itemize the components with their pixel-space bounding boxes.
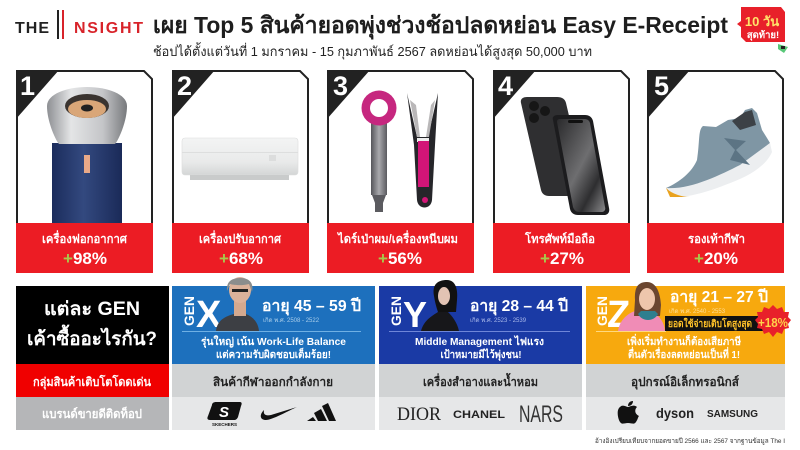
description: แต่ความรับผิดชอบเต็มร้อย!	[216, 347, 331, 361]
gen label Y	[388, 294, 427, 335]
category bar 1: เครื่องฟอกอากาศ	[42, 230, 127, 246]
brands: NARS	[519, 401, 563, 428]
category bar 2	[172, 223, 309, 273]
description	[627, 333, 741, 361]
logo: Adidas	[307, 403, 336, 421]
panel: product 1 air purifier	[16, 70, 153, 273]
icon: hair dryer	[362, 90, 396, 212]
row label: top brands: แบรนด์ขายดีติดท็อป	[42, 406, 142, 421]
category bar 5: รองเท้ากีฬา	[688, 232, 745, 246]
panel: product 2 air conditioner	[172, 70, 309, 273]
number badge 5	[647, 70, 690, 119]
description: เป้าหมายมีไว้พุ่งชน!	[440, 348, 522, 362]
number badge 5: 5	[654, 71, 669, 101]
subtitle: ช้อปได้ตั้งแต่วันที่ 1 มกราคม - 15 กุมภาพันธ์ 2567 ลดหย่อนได้สูงสุด 50,000 บาท	[153, 42, 592, 60]
brands	[172, 397, 375, 430]
badge: last 10 days	[737, 7, 788, 53]
logo: Skechers	[207, 402, 242, 427]
portrait: young woman	[618, 282, 665, 331]
portrait: man	[216, 277, 259, 331]
heading: each gen: แต่ละ GEN	[44, 299, 140, 320]
number badge 1	[16, 70, 59, 119]
number badge 4	[493, 70, 536, 119]
logo: The Insight	[15, 10, 143, 39]
number badge 4: 4	[498, 71, 513, 101]
number badge 3	[327, 70, 370, 119]
age: อายุ 21 – 27 ปี	[670, 287, 768, 307]
category bar 1	[16, 223, 153, 273]
number badge 2	[172, 70, 215, 119]
category	[379, 364, 582, 397]
heading: each gen	[16, 286, 169, 364]
category: สินค้ากีฬาออกกำลังกาย	[213, 375, 333, 389]
description	[201, 334, 346, 361]
category bar 4	[493, 223, 630, 273]
row label: growth category	[16, 364, 169, 397]
badge: last 10 days: สุดท้าย!	[747, 29, 779, 41]
footnote: อ้างอิงเปรียบเทียบจากยอดขายปี 2566 และ 2567 จากฐานข้อมูล The I	[595, 437, 785, 445]
icon: running shoe	[666, 108, 772, 197]
panel: product 4 smartphone	[493, 70, 630, 273]
category bar 1: +98%	[63, 249, 107, 268]
description: ตื่นตัวเรื่องลดหย่อนเป็นที่ 1!	[628, 346, 740, 361]
category bar 3	[327, 223, 474, 273]
brands: SAMSUNG	[707, 409, 758, 420]
category bar 5: +20%	[694, 249, 738, 268]
category bar 2: เครื่องปรับอากาศ	[199, 230, 281, 246]
category: เครื่องสำอางและน้ำหอม	[423, 372, 538, 389]
category bar 5	[647, 223, 784, 273]
gen label Z: Z	[607, 294, 630, 336]
row label: growth category: กลุ่มสินค้าเติบโตโดดเด่น	[33, 374, 152, 390]
number badge 3: 3	[333, 71, 348, 101]
category bar 4: +27%	[540, 249, 584, 268]
logo: The Insight: THE	[15, 20, 49, 37]
icon: hair straightener	[407, 93, 438, 208]
brands: CHANEL	[453, 409, 505, 421]
badge: last 10 days: 10 วัน	[745, 14, 779, 29]
age	[470, 296, 568, 324]
gen label Y: GEN	[388, 296, 404, 326]
category bar 3: ไดร์เป่าผม/เครื่องหนีบผม	[336, 230, 458, 246]
logo: The Insight: NSIGHT	[74, 20, 143, 37]
icon: smartphones	[521, 97, 609, 215]
category	[172, 364, 375, 397]
panel: Gen Y	[379, 280, 582, 430]
logo: Apple	[618, 401, 639, 424]
age: อายุ 45 – 59 ปี	[262, 296, 361, 316]
age	[669, 287, 768, 315]
icon: air purifier	[47, 87, 127, 224]
title: เผย Top 5 สินค้ายอดพุ่งช่วงช้อปลดหย่อน Easy E-Receipt	[153, 12, 728, 40]
brands: DIOR	[397, 404, 441, 425]
gen label X: X	[196, 294, 222, 336]
heading: each gen: เค้าซื้ออะไรกัน?	[27, 324, 157, 350]
callout: highest spending growth: +18%	[758, 316, 788, 330]
description: รุ่นใหญ่ เน้น Work-Life Balance	[201, 334, 346, 349]
number badge 1: 1	[20, 71, 35, 101]
logo: Nike	[261, 407, 297, 420]
age: อายุ 28 – 44 ปี	[470, 296, 568, 316]
panel: Gen Z	[586, 282, 791, 430]
age	[262, 296, 361, 324]
gen label X	[181, 294, 222, 336]
brands: dyson	[656, 405, 694, 421]
callout: highest spending growth	[665, 305, 791, 337]
gen label Z: GEN	[594, 296, 610, 326]
brands	[586, 397, 785, 430]
panel: row headers	[16, 286, 169, 430]
panel: product 5 sports shoe	[647, 70, 784, 273]
age: เกิด พ.ศ. 2540 - 2553	[669, 308, 726, 315]
description: Middle Management ไฟแรง	[415, 335, 544, 348]
panel: product 3 hair dryer and straightener	[327, 70, 474, 273]
gen label Z	[594, 294, 630, 336]
row label: top brands	[16, 397, 169, 430]
category bar 4: โทรศัพท์มือถือ	[524, 231, 595, 246]
category	[586, 364, 785, 397]
brands	[379, 397, 582, 430]
logo: Skechers: S	[219, 404, 229, 421]
description	[415, 335, 544, 362]
category bar 2: +68%	[219, 249, 263, 268]
category: อุปกรณ์อิเล็กทรอนิกส์	[631, 374, 740, 390]
age: เกิด พ.ศ. 2508 - 2522	[263, 317, 320, 324]
number badge 2: 2	[177, 71, 192, 101]
gen label Y: Y	[403, 294, 427, 335]
description: เพิ่งเริ่มทำงานก็ต้องเสียภาษี	[627, 333, 741, 348]
category bar 3: +56%	[378, 249, 422, 268]
panel: Gen X	[172, 277, 375, 430]
logo: Skechers: SKECHERS	[212, 422, 237, 427]
callout: highest spending growth: ยอดใช้จ่ายเติบโตสูงสุด	[668, 317, 752, 331]
age: เกิด พ.ศ. 2523 - 2539	[470, 317, 527, 324]
gen label X: GEN	[181, 296, 197, 326]
portrait: woman	[421, 280, 459, 331]
icon: air conditioner	[182, 138, 298, 180]
